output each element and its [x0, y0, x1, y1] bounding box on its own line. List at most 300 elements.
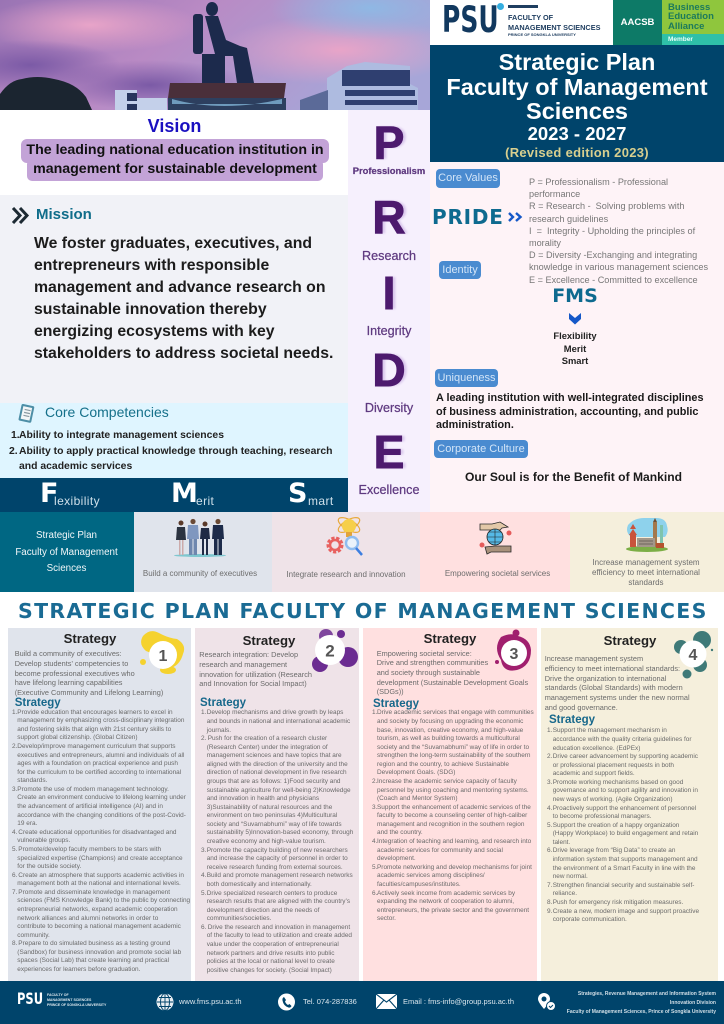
section heading: STRATEGIC PLAN FACULTY OF MANAGEMENT SCIENCES [18, 599, 708, 623]
strategy list: groups that are as follows: 1)Food security and [207, 778, 341, 785]
strategy list: Create an environment conducive to lifelong learning under [17, 794, 186, 801]
label professionalism: Professionalism [353, 165, 425, 176]
intro: (SDGs)) [377, 687, 404, 696]
intro: development (Sustainable Development Goals [377, 678, 528, 687]
strategy list: Create a new, modern image and support proactive [553, 908, 699, 915]
strategy list: Provide education that encourages learners to excel in [17, 709, 173, 716]
strategy list [201, 709, 353, 974]
strategy list: 5. [201, 890, 206, 897]
AACSB badge: AACSB [621, 17, 654, 28]
strategy list: entrepreneurs, the private sector and the government [377, 907, 529, 914]
strategy subheading: Strategy [15, 697, 61, 709]
strategy list: 8. [547, 899, 552, 906]
footer logo: MANAGEMENT SCIENCES [47, 998, 91, 1002]
flexibility: lexibility [54, 494, 100, 508]
core values description: morality [529, 238, 561, 248]
strategy list: Prepare to do simulated business as a testing ground [18, 940, 170, 947]
footer logo: FACULTY OF [47, 993, 69, 997]
label integrity: Integrity [367, 324, 411, 338]
strategy list: and bounds in national and international academic [207, 718, 350, 725]
panel: core competencies [0, 403, 348, 478]
intro: Develop students’ competencies to [15, 659, 128, 668]
letter I: I [383, 267, 395, 319]
strategy list: 5. [547, 822, 552, 829]
Business Education Alliance badge: Education [668, 11, 714, 22]
core values description: R = Research - Solving problems with [529, 201, 684, 211]
corporate culture pill [434, 440, 528, 458]
panel: strategy 3 [363, 628, 537, 981]
intro: and good governance. [545, 703, 618, 712]
mission statement: We foster graduates, executives, and [34, 235, 312, 252]
strategy list [547, 727, 699, 923]
strategy list: entrepreneurial networks, expand academic cooperation [17, 906, 178, 913]
strategy list: (Research Center) under the integration of [207, 744, 328, 751]
panel: strategy 1 [8, 628, 191, 981]
Business Education Alliance badge [662, 0, 724, 34]
strategy list: management both at the national and international levels. [17, 880, 181, 887]
strategy list: (Sandbox) for business innovation and promote social lab [17, 949, 181, 956]
strategy list: 2. [372, 778, 377, 785]
strategy list: community. [17, 932, 50, 939]
strategy list: spaces (Social Lab) that create learning and practical [17, 957, 169, 964]
strategy list: Promote the use of modern management technology. [17, 786, 169, 793]
strategy list: management and recognition in the southern region [377, 821, 524, 828]
intro: Drive the organization to international [545, 674, 666, 683]
strategy list: or professional placement requests in both [553, 762, 674, 769]
core values description: knowledge in various management sciences [529, 262, 708, 272]
strategy list: sciences (FMS Knowledge Bank) to the public by connecting [17, 897, 190, 904]
strategy list: sector. [377, 915, 396, 922]
strategy list: information system that supports management and [553, 856, 698, 863]
badge 2: 2 [325, 642, 335, 660]
core values description: research guidelines [529, 214, 608, 224]
strategy list: Develop/improve management curriculum that supports [17, 743, 175, 750]
strategy list: Drive the research and innovation in management [208, 924, 350, 931]
badge 4: 4 [689, 647, 698, 664]
strategy list: specialized expertise (Champions) and create acceptance [17, 855, 183, 862]
strategy list: for the outside society. [17, 863, 81, 870]
FMS description [553, 330, 597, 366]
strategy list: management by emphasizing cross-disciplinary integration [17, 717, 184, 724]
badge 1 [140, 631, 184, 674]
strategy list: tourism, as well as building towards a multicultural [377, 735, 520, 742]
strategy list: research results that are aligned with the country’s [207, 898, 350, 905]
strategy list: direction of national development in five research [207, 769, 347, 776]
strategy list: Actively seek income from academic services by [377, 890, 515, 897]
caption: Empowering societal services [445, 569, 550, 578]
competency list: Ability to integrate management sciences [19, 430, 224, 441]
strategy list: Push for the creation of a research cluster [208, 735, 327, 742]
division credit: Innovation Division [670, 1000, 716, 1006]
strategy list: Build and promote management research networks [207, 872, 353, 879]
caption: standards [628, 578, 664, 587]
strategy subheading: Strategy [373, 698, 419, 710]
strategy list: 7. [12, 889, 17, 896]
strategy list: personnel by using coaching and mentoring systems. [377, 787, 529, 794]
strategy list: 2. [12, 743, 17, 750]
panel: values and identity [430, 162, 724, 512]
strategy list: academic and support fields. [553, 770, 635, 777]
strategy list: Development Goals. (SDG) [377, 769, 455, 776]
letter D: D [372, 344, 406, 396]
strategy list [372, 709, 534, 922]
strategy list: contribute to becoming a national management academic [17, 923, 181, 930]
statue silhouette [193, 2, 254, 83]
strategy list: education excellence. (EdPEx) [553, 745, 640, 752]
panel: flexibility merit smart band [0, 478, 348, 512]
panel: strategic plan label: Sciences [47, 563, 86, 574]
icon: clipboard [18, 404, 34, 423]
intro [545, 654, 690, 712]
strategy list: (Happy Workplace) to build engagement and retain [553, 830, 698, 837]
core values description [529, 177, 708, 285]
strategy list [12, 709, 190, 973]
main title: Sciences [526, 98, 628, 124]
strategy list: Push for emergency risk mitigation measures. [553, 899, 683, 906]
strategy list: and innovation in health and physicians [207, 795, 319, 802]
icon: bulb gear magnifier [326, 517, 363, 556]
strategy list: support global citizenship. (Global Citizen) [17, 734, 138, 741]
FMS description: Merit [564, 343, 586, 354]
core competencies heading: Core Competencies [45, 404, 169, 420]
member strip: Member [668, 36, 693, 43]
strategy list: Support the management mechanism in [553, 727, 667, 734]
caption: Build a community of executives [143, 569, 257, 578]
intro [199, 650, 312, 688]
faculty wordmark: PRINCE OF SONGKLA UNIVERSITY [508, 32, 576, 37]
strategy list: environment on two peninsulas 4)Multicultural [207, 812, 337, 819]
panel: strategic plan label [0, 512, 134, 592]
strategy subheading: Strategy [549, 714, 595, 726]
flexibility [40, 478, 100, 509]
smart: S [288, 478, 307, 509]
FMS description: Smart [562, 355, 588, 366]
competency list: and academic services [19, 461, 132, 472]
icon: world landmarks [626, 518, 668, 552]
strategy list: 3. [12, 786, 17, 793]
icon: double chevron [12, 207, 29, 224]
icon: globe [156, 994, 174, 1010]
core values description: performance [529, 189, 580, 199]
strategy list: Develop mechanisms and drive growth by leaps [207, 709, 343, 716]
arrow: down chevron [569, 313, 581, 324]
strategy list: management sciences and have topics that are [207, 752, 342, 759]
strategy list: new normal. [553, 873, 588, 880]
strategy list: value under the cooperation of entrepreneurial [207, 941, 339, 948]
footer logo: PSU [17, 989, 43, 1008]
strategy list: 19 era. [17, 820, 37, 827]
card: community of executives [134, 512, 272, 592]
strategy list: region and the country, to achieve Sustainable [377, 761, 509, 768]
main title [446, 49, 708, 124]
small building [115, 90, 167, 110]
intro: standards (Global Standards) with modern [545, 683, 683, 692]
FMS description: Flexibility [553, 330, 597, 341]
strategy list: Promote networking and develop mechanisms for joint [377, 864, 532, 871]
panel: strategic plan label: Faculty of Management [15, 547, 118, 558]
icon: business people [174, 518, 226, 557]
faculty wordmark [508, 5, 600, 37]
core values description: I = Integrity - Upholding the principles of [529, 226, 695, 236]
strategy list: journals. [207, 727, 231, 734]
mission heading: Mission [36, 206, 92, 223]
strategy list: development direction and the needs of [207, 907, 319, 914]
strategy title: Strategy [604, 633, 656, 648]
panel: vision [0, 110, 348, 195]
strategy list: and increase the capacity of personnel in order to [207, 855, 348, 862]
strategy list: governance and to support agility and innovation in [553, 787, 698, 794]
strategy list: faculties/campuses/institutes. [377, 881, 461, 888]
smart [288, 478, 334, 509]
strategy list: Promote the capacity building of new researchers [207, 847, 348, 854]
logo dot [497, 3, 504, 10]
competency list [9, 430, 333, 472]
corporate culture pill: Corporate Culture [437, 443, 525, 455]
PRIDE wordmark: PRIDE [432, 205, 504, 229]
intro: become professional executives who [15, 669, 135, 678]
identity pill: Identity [442, 264, 478, 276]
Business Education Alliance badge: Alliance [668, 21, 704, 32]
strategy list: 4. [201, 872, 206, 879]
caption: efficiency to meet international [592, 568, 700, 577]
strategy list: Drive academic services that engage with communities [377, 709, 534, 716]
strategy list: vulnerable groups. [17, 837, 70, 844]
strategy list: 4. [547, 805, 552, 812]
header logo bar [430, 0, 724, 45]
strategy list: the advancement of artificial intelligence (AI) and in [17, 803, 163, 810]
mission statement: energizing ecosystems with key [34, 323, 275, 340]
strategy title: Strategy [424, 631, 476, 646]
strategy list: 5. [372, 864, 377, 871]
mission statement: stakeholders to address societal needs. [34, 345, 333, 362]
strategy list: 2. [547, 753, 552, 760]
strategy list: Drive leverage from “Big Data” to create an [553, 847, 675, 854]
AACSB badge [613, 0, 662, 45]
strategy list: Create an atmosphere that supports academic activities in [18, 872, 184, 879]
strategy list: Support the enhancement of academic services of the [377, 804, 531, 811]
strategy list: Increase the academic service capacity of faculty [377, 778, 517, 785]
core values pill [436, 169, 500, 188]
strategy list: reliance. [553, 890, 577, 897]
strategy list: policies at the local or national level to create [207, 958, 335, 965]
badge 3 [495, 630, 531, 671]
strategy list: for the curriculum to be certified according to international [17, 769, 181, 776]
caption: Integrate research and innovation [286, 570, 406, 579]
card: management system efficiency [570, 512, 724, 592]
mission statement: sustainable innovation thereby [34, 301, 267, 318]
strategy list: 8. [12, 940, 17, 947]
footer logo [17, 989, 106, 1008]
core values description: P = Professionalism - Professional [529, 177, 668, 187]
corporate culture statement: Our Soul is for the Benefit of Mankind [465, 470, 682, 484]
intro: (Executive Community and Lifelong Learning) [15, 688, 163, 697]
badge 1: 1 [159, 648, 168, 665]
intro: and Innovation for Social Impact) [199, 679, 307, 688]
strategy list: positive changes for society. (Social Impact) [207, 967, 332, 974]
intro: innovation for utilization (Research [199, 670, 312, 679]
intro: Increase management system [545, 654, 643, 663]
strategy list: both domestically and internationally. [207, 881, 312, 888]
strategy list: the environment of a Smart Faculty in line with the [553, 865, 695, 872]
intro: Drive and strengthen communities [377, 658, 488, 667]
FMS wordmark: FMS [552, 285, 598, 307]
strategy list: academic services among disciplines/ [377, 872, 485, 879]
strategy list: executives and entrepreneurs, alumni and individuals of all [17, 752, 184, 759]
strategy list: 1. [12, 709, 17, 716]
footer logo: PRINCE OF SONGKLA UNIVERSITY [47, 1003, 106, 1007]
uniqueness statement [436, 392, 704, 431]
arrow: double chevron [508, 212, 522, 222]
strategy list: accordance with the changing conditions of the post-Covid- [17, 812, 186, 819]
strategy list: 5. [12, 846, 17, 853]
strategy list: of the faculty to lead to utilization and create added [207, 932, 352, 939]
footer [0, 981, 724, 1024]
merit: erit [196, 494, 214, 508]
strategy list: and fostering skills that align with 21st century skills to [17, 726, 171, 733]
card: empowering societal services [420, 512, 570, 592]
faculty wordmark: MANAGEMENT SCIENCES [508, 23, 600, 32]
uniqueness statement: A leading institution with well-integrated disciplines [436, 392, 703, 404]
strategy list: new ways of working. (Agile Organization) [553, 796, 673, 803]
intro: and society through sustainable [377, 668, 480, 677]
strategy list: society and “Suvarnabhumi” way of life towards [207, 821, 342, 828]
strategy list: strengthen the long-term sustainability of the southern [377, 752, 531, 759]
division credit: Faculty of Management Sciences, Prince of Songkla University [567, 1009, 716, 1015]
letter P: P [374, 117, 404, 169]
strategy list: Proactively support the enhancement of personnel [553, 805, 696, 812]
badge 4 [674, 631, 714, 678]
identity pill [439, 261, 481, 279]
main title: Faculty of Management [446, 74, 708, 100]
merit: M [171, 478, 198, 509]
mission statement [34, 235, 333, 362]
panel: strategic plan label: Strategic Plan [36, 530, 97, 541]
uniqueness pill: Uniqueness [437, 372, 496, 384]
strategy list: 4. [12, 829, 17, 836]
intro: Research integration: Develop [199, 650, 298, 659]
Business Education Alliance badge: Business [668, 2, 710, 13]
member strip [662, 34, 724, 45]
label diversity: Diversity [365, 401, 413, 415]
strategy list: Drive specialized research centers to produce [207, 890, 337, 897]
strategy list: accordance with the quality criteria guidelines for [553, 736, 692, 743]
intro: Build a community of executives: [15, 649, 122, 658]
vision heading: Vision [148, 116, 201, 136]
vision statement [21, 139, 329, 181]
strategy list: to become professional managers. [553, 813, 651, 820]
strategy list: Promote/develop faculty members to be stars with [18, 846, 161, 853]
strategy list: Strengthen financial security and sustainable self- [553, 882, 694, 889]
strategy subheading: Strategy [200, 697, 246, 709]
core values description: D = Diversity -Exchanging and integrating [529, 250, 697, 260]
intro: have lifelong learning capabilities [15, 678, 122, 687]
tree [0, 77, 92, 110]
competency list: 2. [9, 446, 18, 456]
core values description: E = Excellence - Committed to excellence [529, 275, 698, 285]
title block [430, 45, 724, 162]
uniqueness statement: administration. [436, 419, 514, 431]
strategy list: standards. [17, 777, 47, 784]
badge 2 [312, 629, 358, 672]
vision statement: The leading national education institution in [26, 142, 324, 158]
icon: envelope [376, 994, 397, 1009]
strategy list: network alliances and alumni networks in order to [17, 915, 158, 922]
strategy list: 3. [372, 804, 377, 811]
panel: mission [0, 195, 348, 403]
uniqueness pill [435, 369, 498, 387]
mission statement: management and advance research on [34, 279, 325, 296]
strategy list: Integration of teaching and learning, and research into [377, 838, 531, 845]
strategy list: and society by focusing on upgrading the economic [377, 718, 523, 725]
competency list: Ability to apply practical knowledge through teaching, research [19, 446, 333, 456]
strategy list: society and the “Suvarnabhumi” way of life in order to [377, 744, 529, 751]
strategy list: expanding the network of cooperation to alumni, [377, 898, 514, 905]
email: Email : fms-info@group.psu.ac.th [403, 997, 514, 1006]
strategy list: sustainable agriculture for well-being 2)Knowledge [207, 787, 351, 794]
strategy list: ages with a foundation on practical experience and push [17, 760, 178, 767]
smart: mart [308, 494, 334, 508]
intro [15, 649, 163, 697]
strategy list: base, innovation, creative economy, and high-value [377, 727, 523, 734]
division credit [567, 991, 716, 1015]
telephone: Tel. 074-287836 [303, 997, 357, 1006]
panel: strategy 4 [541, 628, 718, 981]
intro: management systems under the new normal [545, 693, 690, 702]
strategy title: Strategy [64, 631, 116, 646]
intro [377, 648, 528, 696]
strategy list: receive research funding from external sources. [207, 864, 343, 871]
strategy title: Strategy [243, 633, 295, 648]
strategy list: 2. [201, 735, 206, 742]
intro: research and management [199, 660, 287, 669]
strategy list: experiences for learners before graduation. [17, 966, 140, 973]
intro: Empowering societal service: [377, 648, 472, 658]
icon: phone [278, 994, 295, 1010]
strategy list: 6. [201, 924, 206, 931]
caption: Increase management system [592, 558, 700, 567]
main title: Strategic Plan [499, 49, 655, 75]
strategy list: development. [377, 855, 416, 862]
strategy list: 4. [372, 838, 377, 845]
letter E: E [374, 426, 404, 478]
label research: Research [362, 249, 416, 263]
strategy list: 3. [547, 779, 552, 786]
competency list: 1. [11, 430, 20, 441]
strategy list: 9. [547, 908, 552, 915]
card: integrate research [272, 512, 420, 592]
strategy list: 1. [201, 709, 206, 716]
strategy list: and the country. [377, 829, 423, 836]
strategy list: aligned with the direction of the university and the [207, 761, 348, 768]
strategy list: 6. [547, 847, 552, 854]
label excellence: Excellence [359, 483, 419, 497]
pedestal [168, 83, 286, 98]
vision statement: management for sustainable development [33, 161, 317, 177]
flexibility: F [40, 478, 58, 509]
strategy list: sustainability 5)Innovation-based economy, through [207, 829, 353, 836]
faculty wordmark: FACULTY OF [508, 13, 553, 22]
mission statement: entrepreneurs with responsible [34, 257, 269, 274]
website: www.fms.psu.ac.th [179, 997, 242, 1006]
strategy list: communities/societies. [207, 915, 271, 922]
strategy list: creative economy and high-value tourism. [207, 838, 326, 845]
main building [327, 62, 418, 110]
panel: PRIDE column [348, 110, 430, 512]
letter R: R [372, 191, 406, 243]
strategy list: corporate communication. [553, 916, 627, 923]
photo: statue at dusk [0, 0, 430, 110]
strategy list: Promote working mechanisms based on good [553, 779, 683, 786]
